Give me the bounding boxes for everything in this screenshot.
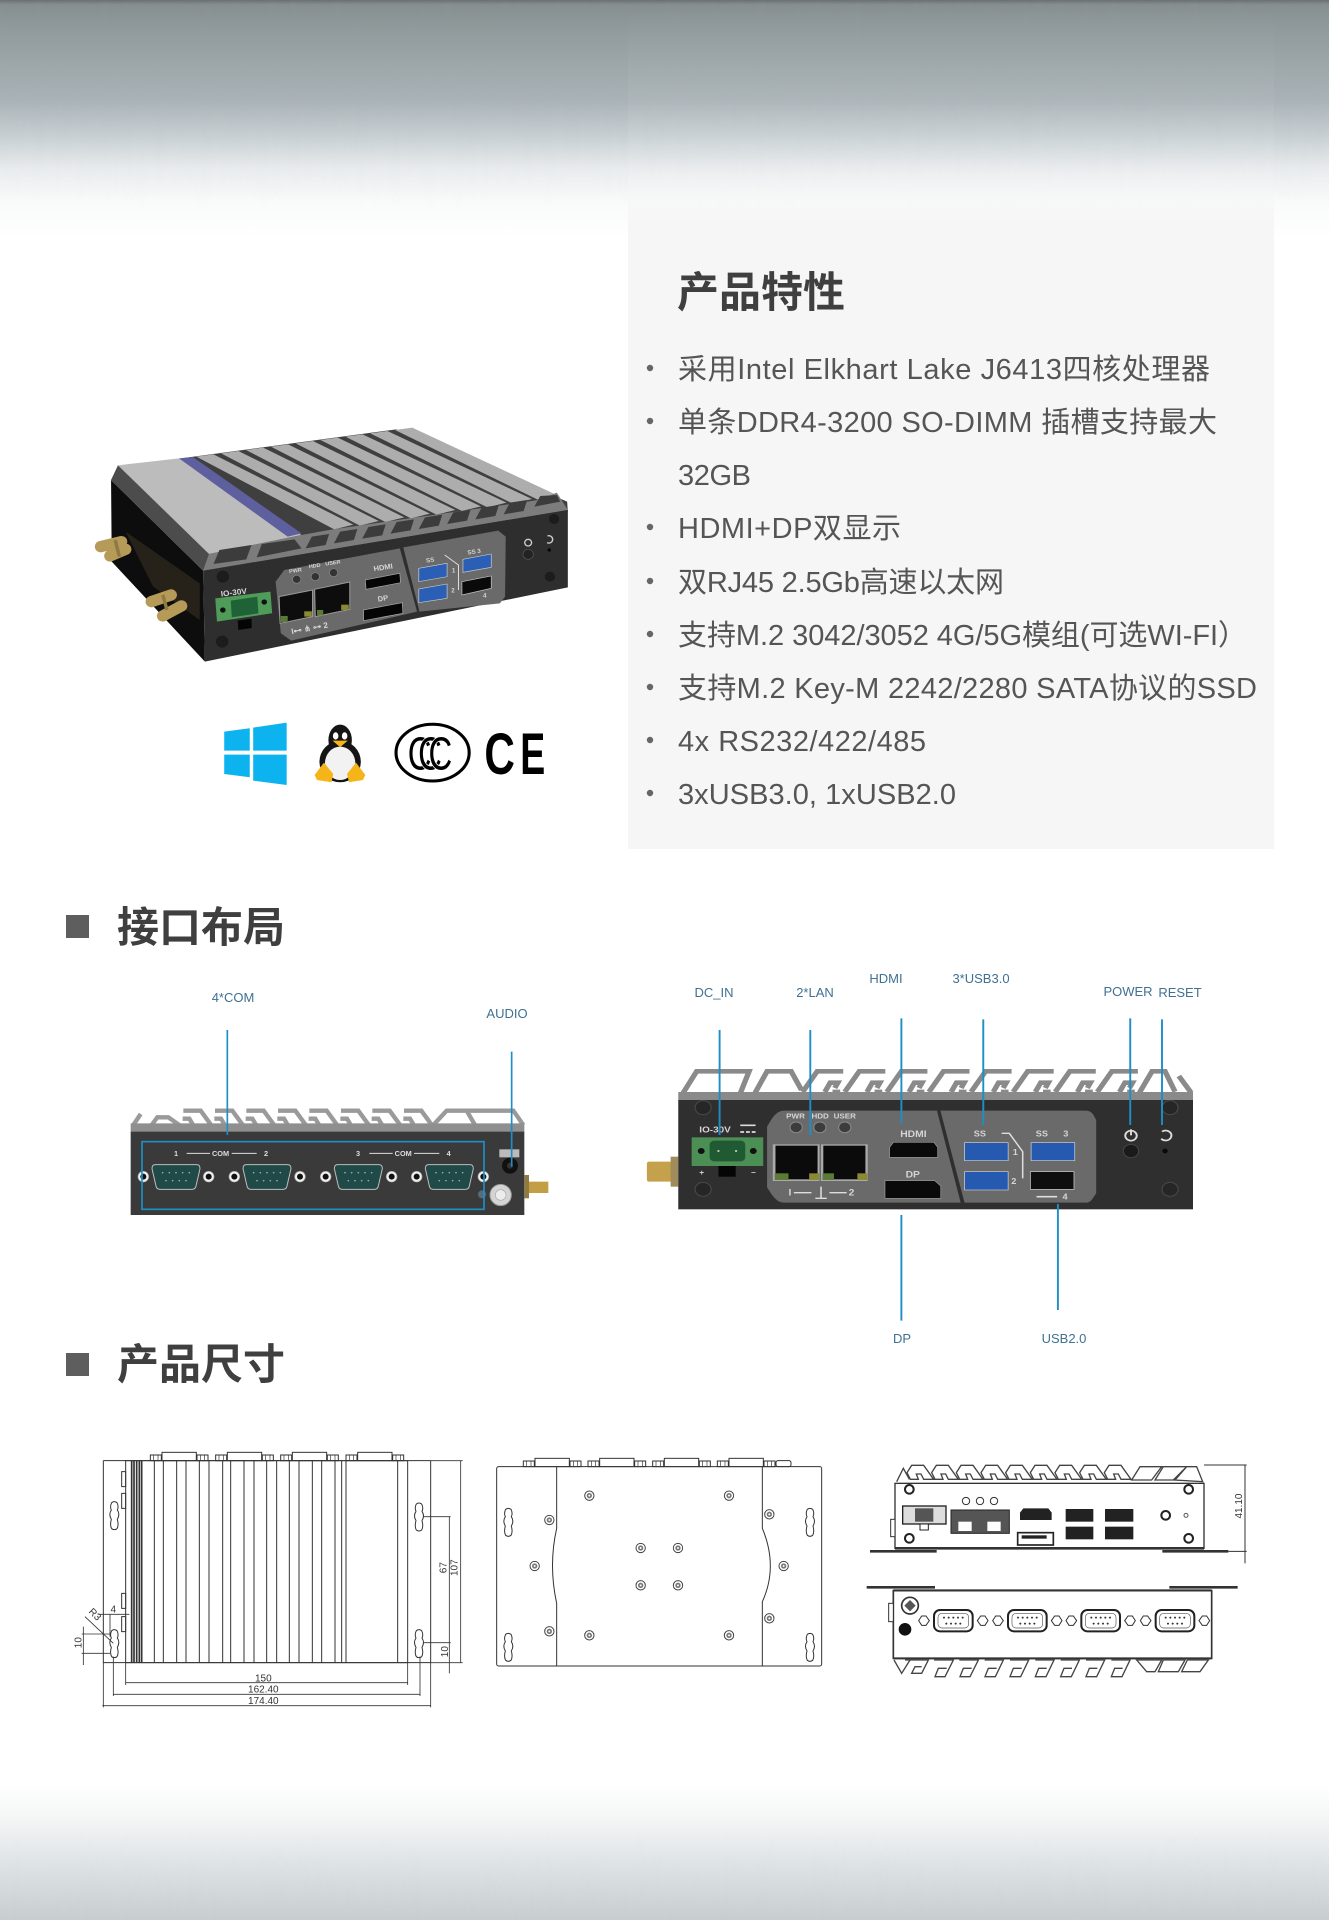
OS and certification icons xyxy=(224,721,545,787)
label: AUDIO: AUDIO xyxy=(486,1006,528,1021)
port labels: 2*LAN xyxy=(796,985,834,1000)
plate outline xyxy=(103,1461,431,1663)
port labels: USB2.0 xyxy=(1042,1331,1086,1346)
port labels: HDMI xyxy=(869,971,903,986)
COM ports: 1 xyxy=(174,1149,178,1158)
LAN ports and LEDs: HDD xyxy=(811,1112,829,1120)
rear elevation xyxy=(867,1587,1238,1677)
USB ports xyxy=(965,1129,1075,1201)
feature list xyxy=(647,353,1257,811)
LAN ports: PWR xyxy=(289,567,303,575)
leader lines xyxy=(720,1018,1162,1321)
terminal block: IO-30V xyxy=(220,587,248,599)
keyholes xyxy=(504,1508,814,1661)
port labels: DP xyxy=(893,1331,911,1346)
product photo: fanless mini PC xyxy=(101,428,568,662)
ports xyxy=(903,1497,1133,1545)
USB ports: SS xyxy=(974,1129,986,1139)
COM ports: 2 xyxy=(264,1149,268,1158)
antenna connector xyxy=(647,1157,678,1187)
port labels: RESET xyxy=(1158,985,1202,1000)
footer brushed-metal gradient xyxy=(0,1785,1329,1920)
feature list: 支持M.2 Key-M 2242/2280 SATA协议的SSD xyxy=(678,672,1257,705)
icon: windows xyxy=(224,723,287,785)
dimension lines: 107 xyxy=(450,1559,461,1576)
rear view with callouts xyxy=(131,990,548,1215)
corner screws xyxy=(695,1101,1178,1196)
grey port panels xyxy=(767,1111,1096,1203)
port labels xyxy=(694,971,1202,1346)
connectors xyxy=(150,1452,404,1461)
front fins xyxy=(678,1071,1193,1101)
feature list: 支持M.2 3042/3052 4G/5G模组(可选WI-FI） xyxy=(678,619,1247,652)
top plate and fins xyxy=(111,428,568,571)
dimension lines: 4 xyxy=(111,1605,117,1616)
HDMI and DP ports: HDMI xyxy=(373,562,393,573)
DC terminal xyxy=(692,1125,763,1177)
COM ports: COM xyxy=(212,1149,229,1158)
heading: features: 产品特性 xyxy=(677,269,845,316)
front body xyxy=(678,1100,1193,1209)
dimension 41.10: 41.10 xyxy=(1234,1493,1245,1518)
HDMI and DP: HDMI xyxy=(900,1130,927,1140)
USB ports: 3 xyxy=(1063,1129,1069,1139)
LAN ports and LEDs: 2 xyxy=(849,1188,854,1198)
dimension lines: 174.40 xyxy=(248,1696,279,1707)
icon: CE mark: E xyxy=(520,723,545,787)
terminal block xyxy=(215,587,272,630)
USB ports: 2 xyxy=(1011,1177,1017,1186)
LAN ports and LEDs xyxy=(773,1112,868,1198)
front face xyxy=(203,510,568,662)
front elevation xyxy=(870,1465,1247,1563)
USB ports: SS xyxy=(1036,1129,1048,1139)
LAN ports xyxy=(279,559,350,636)
dimension lines: 150 xyxy=(255,1674,272,1685)
LAN ports and LEDs: PWR xyxy=(786,1112,806,1120)
fins xyxy=(897,1465,1203,1482)
rear body xyxy=(131,1132,524,1215)
heatsink fins xyxy=(122,1461,408,1663)
port labels: 3*USB3.0 xyxy=(952,971,1010,986)
LAN ports and LEDs: I xyxy=(788,1188,792,1198)
HDMI and DP xyxy=(885,1130,941,1198)
mounting screws xyxy=(530,1491,788,1640)
USB ports: SS xyxy=(426,557,435,565)
power and reset xyxy=(1123,1129,1171,1158)
USB ports: 4 xyxy=(483,592,487,599)
dimension lines: 10 xyxy=(73,1637,84,1648)
drawing: front and rear elevations xyxy=(867,1465,1247,1677)
USB ports: 4 xyxy=(1063,1192,1068,1201)
plate outline xyxy=(497,1467,822,1666)
drawing: bottom view xyxy=(497,1458,822,1666)
port labels: POWER xyxy=(1103,984,1153,999)
icon: linux penguin xyxy=(315,725,365,782)
feature list: 双RJ45 2.5Gb高速以太网 xyxy=(678,566,1004,599)
icon: CCC mark: C xyxy=(428,727,452,780)
dimension lines: R3 xyxy=(86,1606,103,1624)
plate folds xyxy=(552,1467,770,1666)
HDMI and DP ports xyxy=(364,562,403,621)
LAN ports: I⊷ ⋔ ⊶ 2 xyxy=(290,621,329,636)
icon: CE mark: C xyxy=(484,721,515,787)
COM ports: 4 xyxy=(447,1149,452,1158)
dimension lines: 10 xyxy=(440,1646,451,1657)
front view with callouts xyxy=(647,971,1202,1346)
dimension lines: 67 xyxy=(438,1562,449,1573)
feature list: 32GB xyxy=(678,460,751,492)
DC terminal: − xyxy=(751,1168,756,1177)
feature list: 3xUSB3.0, 1xUSB2.0 xyxy=(678,779,956,811)
COM ports: COM xyxy=(395,1149,412,1158)
LAN ports: HDD xyxy=(308,563,321,570)
HDMI and DP: DP xyxy=(906,1170,921,1180)
feature list: 单条DDR4-3200 SO-DIMM 插槽支持最大 xyxy=(678,406,1217,439)
LAN ports and LEDs: USER xyxy=(834,1112,857,1120)
audio jack and antenna xyxy=(478,1149,548,1206)
DC terminal: + xyxy=(699,1168,705,1177)
port labels: DC_IN xyxy=(694,985,734,1000)
callout frame and leader lines xyxy=(142,1030,512,1209)
DC terminal: IO-30V xyxy=(699,1125,732,1134)
USB ports: SS 3 xyxy=(467,548,482,557)
HDMI and DP ports: DP xyxy=(377,593,389,604)
left side with antennas xyxy=(101,480,205,662)
USB ports: 1 xyxy=(452,568,456,575)
section heading: interface layout: 接口布局 xyxy=(117,904,285,951)
header brushed-metal gradient xyxy=(0,0,1329,240)
feature list: 采用Intel Elkhart Lake J6413四核处理器 xyxy=(678,353,1210,386)
feature list: HDMI+DP双显示 xyxy=(678,513,901,545)
USB ports: 1 xyxy=(1013,1148,1018,1157)
COM ports xyxy=(138,1149,489,1189)
front device drawing xyxy=(647,1018,1193,1321)
icon: CCC mark: C xyxy=(418,727,442,780)
feature list: 4x RS232/422/485 xyxy=(678,726,926,758)
label: 4*COM: 4*COM xyxy=(212,990,254,1005)
icon: CCC mark: C xyxy=(408,727,431,780)
icon: CCC mark xyxy=(396,724,469,781)
screws xyxy=(905,1485,1193,1543)
section heading: product dimensions: 产品尺寸 xyxy=(117,1341,285,1388)
fins xyxy=(893,1658,1212,1677)
round connectors xyxy=(899,1597,918,1636)
USB ports xyxy=(419,548,491,603)
LAN ports: USER xyxy=(325,559,341,568)
panel: product features xyxy=(628,0,1274,849)
keyholes xyxy=(110,1502,423,1658)
dimension lines xyxy=(73,1461,463,1707)
power and reset xyxy=(523,536,553,559)
USB ports: 2 xyxy=(451,588,455,595)
connectors xyxy=(523,1458,791,1467)
dimension lines: 162.40 xyxy=(248,1685,279,1696)
drawing: top view with dimensions xyxy=(73,1452,463,1707)
rear fins xyxy=(131,1111,524,1132)
dimension 41.10 xyxy=(1204,1465,1247,1563)
icon: CE mark xyxy=(484,721,545,787)
COM connectors xyxy=(919,1610,1210,1631)
rear device drawing xyxy=(131,1030,548,1215)
COM ports: 3 xyxy=(356,1149,360,1158)
